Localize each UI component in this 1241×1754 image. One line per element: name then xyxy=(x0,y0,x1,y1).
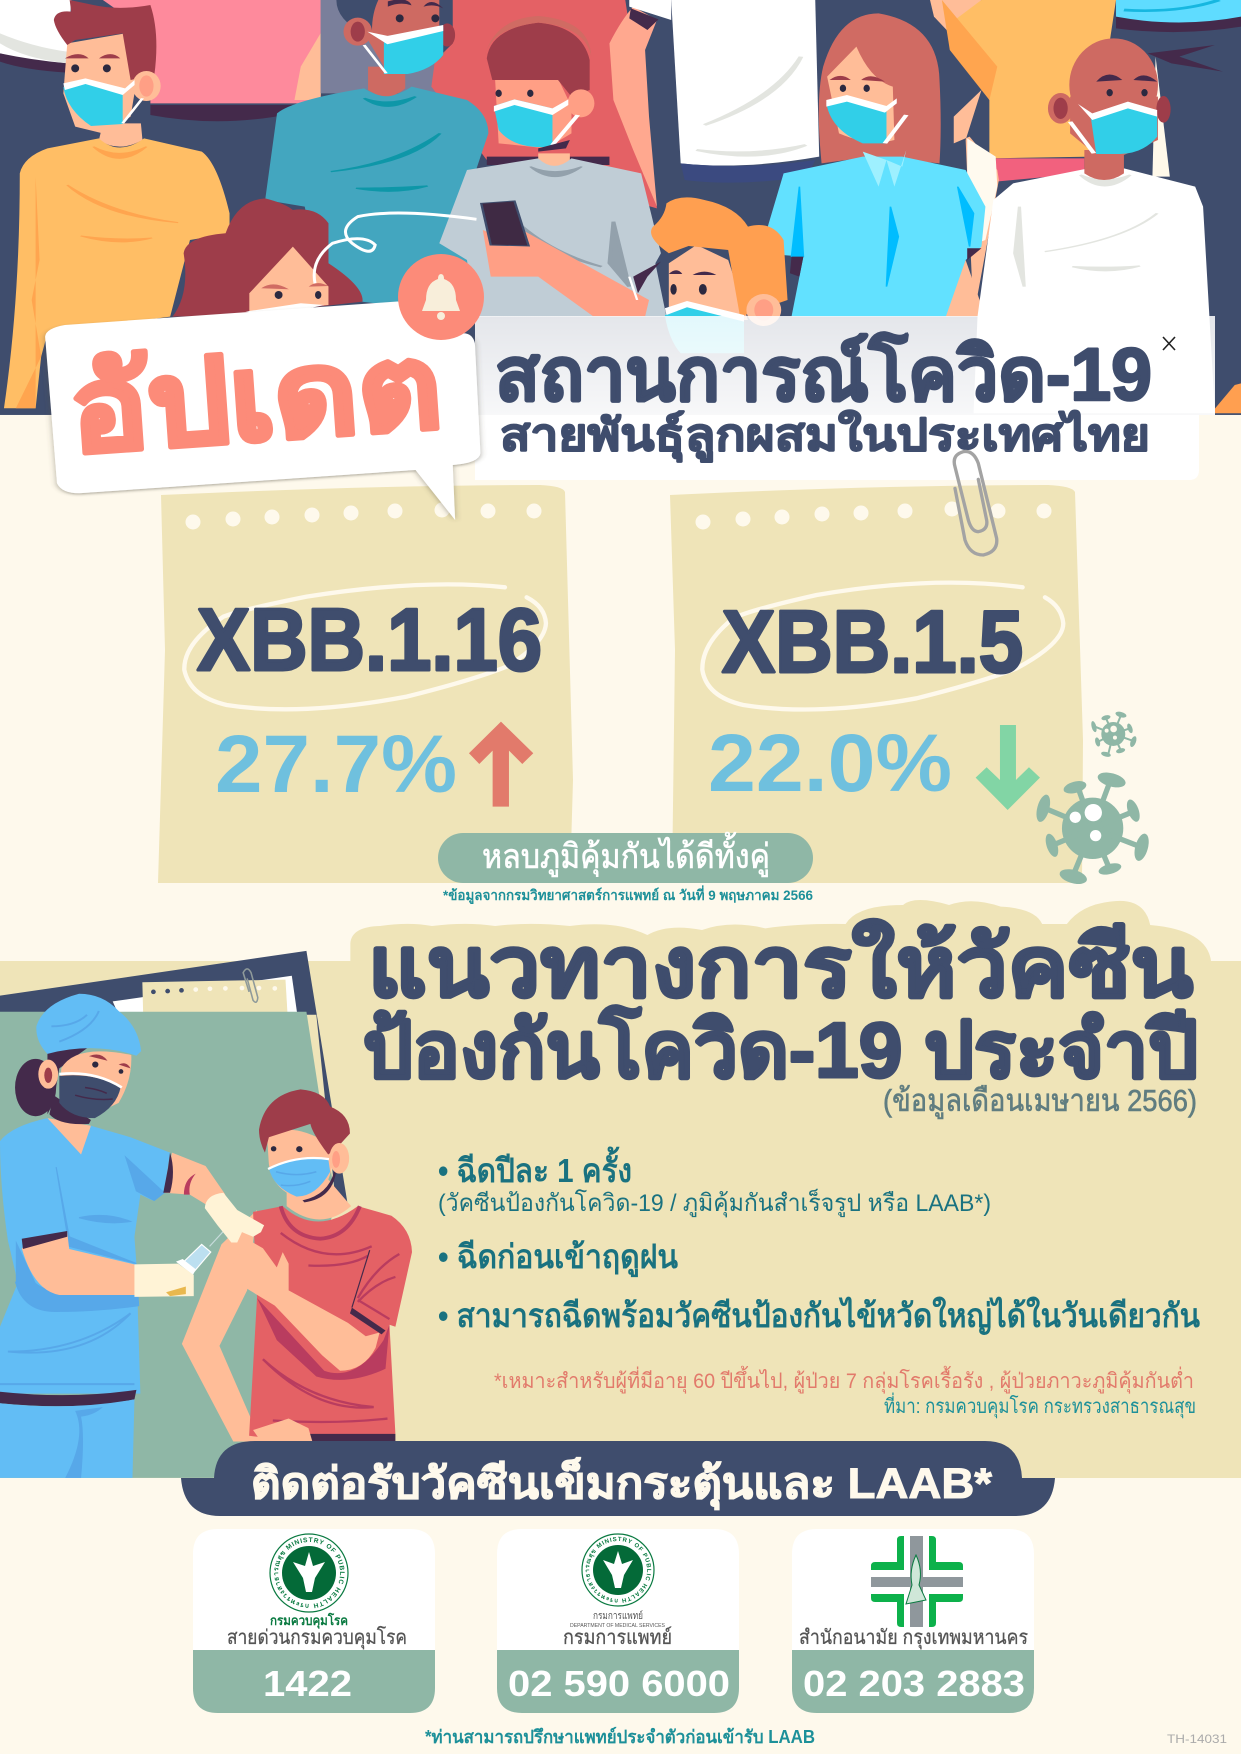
pill: immune evasion xyxy=(438,832,813,883)
icon: virus large xyxy=(1034,770,1151,887)
document code: TH-14031 xyxy=(1167,1732,1227,1746)
arrow down xyxy=(976,725,1040,810)
clipboard and illustration xyxy=(0,951,412,1478)
notification wire xyxy=(314,213,476,283)
logo: ministry of public health: กระทรวงสาธารณสุข MINISTRY OF PUBLIC HEALTH xyxy=(274,1537,345,1608)
card: bangkok health department: 02 203 2883 xyxy=(803,1663,1025,1704)
arrow up xyxy=(469,722,533,807)
crowd illustration xyxy=(0,0,1241,415)
note card: XBB.1.5 xyxy=(670,485,1083,883)
card: department of medical services xyxy=(497,1529,739,1713)
note card: XBB.1.16 xyxy=(158,485,573,883)
contact banner: ติดต่อรับวัคซีนเข็มกระตุ้นและ LAAB* xyxy=(251,1457,992,1511)
contact banner xyxy=(181,1441,1055,1516)
card: department of medical services: กรมการแพทย์ xyxy=(593,1610,643,1622)
heading: covid situation: สถานการณ์โควิด-19 xyxy=(495,331,1152,416)
bubble heading: อัปเดต xyxy=(66,320,446,478)
card: disease control hotline xyxy=(193,1529,435,1713)
clipboard xyxy=(0,951,348,1478)
person 3: grey shirt xyxy=(439,16,666,317)
guidance bullets: • ฉีดปีละ 1 ครั้ง xyxy=(438,1146,632,1189)
pill: immune evasion: หลบภูมิคุ้มกันได้ดีทั้งคู่ xyxy=(482,832,770,877)
person: white shirt xyxy=(609,0,819,207)
card: department of medical services: DEPARTMENT OF MEDICAL SERVICES xyxy=(570,1623,666,1629)
speech bubble xyxy=(45,302,480,520)
person 2: teal shirt xyxy=(265,0,488,317)
card: department of medical services: กรมการแพทย์ xyxy=(563,1626,672,1649)
card: bangkok health department xyxy=(792,1529,1034,1713)
percentage: 22.0% xyxy=(708,718,952,809)
guidance bullets: • ฉีดก่อนเข้าฤดูฝน xyxy=(438,1238,678,1278)
paperclip xyxy=(954,451,997,555)
bottom note: *ท่านสามารถปรึกษาแพทย์ประจำตัวก่อนเข้ารับ LAAB xyxy=(425,1726,815,1747)
panel: vaccine guidance xyxy=(0,900,1241,1478)
guidance bullets: (วัคซีนป้องกันโควิด-19 / ภูมิคุ้มกันสำเร็จรูป หรือ LAAB*) xyxy=(438,1188,991,1218)
nurse xyxy=(0,994,225,1478)
logo: ministry of public health: กระทรวงสาธารณสุข MINISTRY OF PUBLIC HEALTH xyxy=(586,1536,652,1603)
logo: green cross xyxy=(871,1536,963,1627)
guidance bullets xyxy=(438,1146,1200,1335)
gloves and syringe xyxy=(134,1193,264,1297)
subheading: สายพันธุ์ลูกผสมในประเทศไทย xyxy=(500,409,1150,463)
person 6: white shirt bald man xyxy=(974,38,1215,413)
person 4: blue shirt woman xyxy=(760,13,985,317)
card: disease control hotline: สายด่วนกรมควบคุมโรค xyxy=(227,1626,407,1650)
percentage: 27.7% xyxy=(215,719,457,810)
source note: *ข้อมูลจากกรมวิทยาศาสตร์การแพทย์ ณ วันที่ 9 พฤษภาคม 2566 xyxy=(443,885,813,904)
card: bangkok health department: สำนักอนามัย กรุงเทพมหานคร xyxy=(799,1627,1028,1650)
heading: annual vaccine: ป้องกันโควิด-19 ประจำปี xyxy=(363,1004,1198,1094)
person 1: yellow shirt xyxy=(4,0,230,408)
variant name: XBB.1.16 xyxy=(197,590,542,689)
card: disease control hotline: กรมควบคุมโรค xyxy=(270,1612,348,1629)
woman with red hair xyxy=(173,198,363,317)
card: disease control hotline: 1422 xyxy=(263,1663,352,1704)
top right shirt xyxy=(1116,0,1241,413)
heading: vaccine guidance: แนวทางการให้วัคซีน xyxy=(368,919,1193,1014)
child with orange hair xyxy=(651,197,788,353)
title panel xyxy=(475,316,1215,480)
eligibility note: *เหมาะสำหรับผู้ที่มีอายุ 60 ปีขึ้นไป, ผู้ป่วย 7 กลุ่มโรคเรื้อรัง , ผู้ป่วยภาวะภูมิคุ้มกันต่ำ xyxy=(494,1366,1194,1394)
icon: virus small xyxy=(1090,711,1138,758)
person: yellow top right xyxy=(930,0,1116,317)
date note: (ข้อมูลเดือนเมษายน 2566) xyxy=(883,1083,1197,1119)
bell badge xyxy=(398,254,484,340)
variant name: XBB.1.5 xyxy=(722,592,1023,691)
phone and hand xyxy=(481,201,661,317)
icon: close mark xyxy=(1163,337,1175,350)
patient xyxy=(182,1089,412,1442)
card: department of medical services: 02 590 6000 xyxy=(508,1663,730,1704)
